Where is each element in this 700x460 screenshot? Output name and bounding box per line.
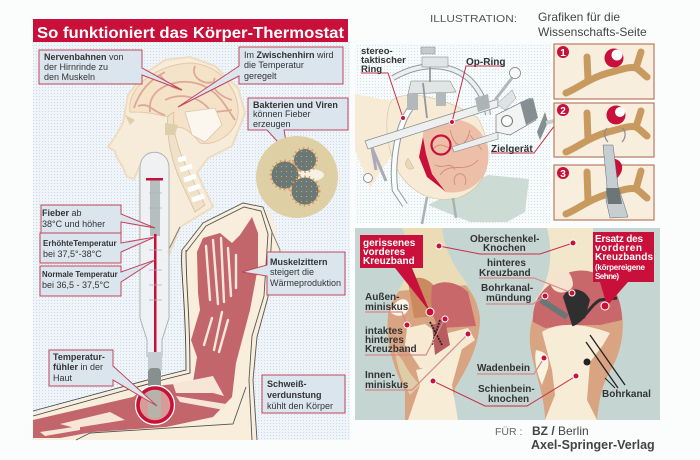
- label: Ersatz des vorderen Kreuzbands: Ersatz des: [595, 234, 643, 245]
- leader: stereotaktischer Ring: Ring: [361, 64, 382, 75]
- panel: body thermostat: [33, 19, 350, 440]
- measuring bar: [365, 99, 498, 149]
- credit: illustration heading: ILLUSTRATION:: [430, 13, 517, 25]
- credit: client: BZ / Berlin: [532, 424, 589, 438]
- label: Innenmeniskus: miniskus: [365, 380, 409, 391]
- label: Ersatz des vorderen Kreuzbands: [593, 232, 654, 310]
- label: hinteres Kreuzband: Kreuzband: [479, 268, 531, 279]
- label: Wadenbein: [477, 355, 547, 374]
- target device block: [452, 68, 580, 152]
- icon: left knob: [364, 174, 372, 182]
- callout: Nervenbahnen: [39, 50, 182, 90]
- thermometer: [140, 152, 169, 418]
- label: intaktes hinteres Kreuzband: [365, 316, 448, 355]
- panel: step 1 aneurysm: 1: [560, 48, 566, 59]
- label: Oberschenkelknochen: [436, 234, 576, 254]
- arm with muscles: [33, 203, 280, 440]
- label: Ersatz des vorderen Kreuzbands: vorderen: [595, 243, 642, 254]
- icon: bacteria and viruses: [256, 136, 338, 218]
- callout: Temperaturfühler: Temperatur-: [53, 352, 105, 362]
- callout: Fieber: [41, 205, 155, 233]
- callout: Schweißverdunstung: kühlt den Körper: [267, 401, 333, 411]
- leader: stereotaktischer Ring: [361, 46, 406, 120]
- label: Schienbeinknochen: Schienbein-: [478, 384, 535, 395]
- callout: Bakterien und Viren: Bakterien und Viren: [253, 100, 338, 110]
- label: Schienbeinknochen: [430, 373, 579, 406]
- panel: step 2 clip: [554, 103, 654, 157]
- panel: step 3 instrument: [554, 145, 654, 220]
- label: gerissenes vorderes Kreuzband: gerissenes: [363, 238, 416, 249]
- label: Bohrkanal: [602, 378, 651, 400]
- op ring arc: [393, 66, 488, 115]
- panel: stereotactic surgery: [355, 44, 580, 224]
- callout: Temperaturfühler: fühler in der: [53, 362, 103, 372]
- credit: illustration heading: Grafiken für die: [538, 10, 620, 24]
- label: Bohrkanalmündung: mündung: [486, 293, 532, 304]
- clamps on top: [407, 47, 456, 118]
- title: So funktioniert das Körper-Thermostat: [37, 25, 345, 42]
- label: Außenmeniskus: [365, 292, 410, 328]
- label: Wadenbein: Wadenbein: [477, 363, 530, 374]
- label: Bohrkanalmündung: Bohrkanal-: [481, 283, 533, 294]
- label: hinteres Kreuzband: hinteres: [487, 258, 526, 269]
- panel: step 3 instrument: 3: [560, 169, 566, 180]
- body: head and neck: [108, 57, 245, 260]
- callout: Schweißverdunstung: verdunstung: [267, 390, 322, 400]
- credit: client: Axel-Springer-Verlag: [531, 438, 655, 452]
- label: Ersatz des vorderen Kreuzbands: Sehne): [595, 272, 619, 281]
- callout: Erhöhte Temperatur: [40, 233, 155, 263]
- callout: Schweißverdunstung: [262, 375, 345, 413]
- credit: client: [495, 424, 655, 452]
- callout: Zwischenhirn: [178, 47, 343, 107]
- label: gerissenes vorderes Kreuzband: Kreuzband: [363, 256, 415, 267]
- callout: Erhöhte Temperatur: ErhöhteTemperatur: [43, 239, 117, 248]
- callout: Temperaturfühler: Haut: [53, 373, 73, 383]
- head support rods: [422, 197, 456, 224]
- label: Oberschenkelknochen: Oberschenkel-: [470, 234, 539, 245]
- callout: Normale Temperatur: [40, 260, 155, 296]
- label: Ersatz des vorderen Kreuzbands: (körpereigene: [595, 263, 646, 272]
- panel: step 1 aneurysm: [554, 44, 654, 99]
- label: intaktes hinteres Kreuzband: intaktes: [365, 326, 403, 337]
- label: gerissenes vorderes Kreuzband: [360, 235, 434, 316]
- callout: Muskelzittern: Muskelzittern: [270, 257, 328, 267]
- leader: stereotaktischer Ring: taktischer: [361, 55, 406, 66]
- callout: Bakterien und Viren: können Fieber: [253, 109, 311, 119]
- stereotactic ring: [394, 103, 415, 205]
- callout: Fieber: Fieber ab: [42, 208, 82, 218]
- callout: Nervenbahnen: Nervenbahnen von: [44, 52, 124, 62]
- right knee illustration: [530, 228, 625, 420]
- label: Schienbeinknochen: knochen: [488, 394, 529, 405]
- callout: Normale Temperatur: Normale Temperatur: [42, 270, 118, 279]
- callout: Nervenbahnen: den Muskeln: [44, 72, 95, 82]
- target ring: [432, 136, 450, 154]
- callout: Zwischenhirn: geregelt: [244, 71, 277, 81]
- callout: Bakterien und Viren: erzeugen: [253, 119, 291, 129]
- leader: Zielgerät: Zielgerät: [491, 144, 533, 155]
- label: intaktes hinteres Kreuzband: Kreuzband: [365, 344, 417, 355]
- title: [33, 19, 348, 42]
- label: Bohrkanalmündung: [481, 283, 548, 304]
- credit: illustration heading: [430, 10, 647, 39]
- label: Oberschenkelknochen: Knochen: [483, 243, 526, 254]
- callout: Fieber: 38°C und höher: [42, 219, 105, 229]
- leader: stereotaktischer Ring: stereo-: [361, 46, 393, 57]
- label: Außenmeniskus: miniskus: [365, 302, 409, 313]
- callout: Normale Temperatur: bei 36,5 - 37,5°C: [42, 280, 110, 290]
- credit: illustration heading: Wissenschafts-Seite: [538, 25, 647, 39]
- leader: Op-Ring: Op-Ring: [466, 57, 505, 68]
- operating table: [428, 175, 529, 222]
- label: Ersatz des vorderen Kreuzbands: Kreuzbands: [595, 252, 653, 263]
- callout: Temperaturfühler: [49, 350, 157, 406]
- temperature sensor ring: [136, 386, 174, 424]
- left knee illustration: [387, 228, 480, 420]
- callout: Bakterien und Viren: [248, 98, 348, 153]
- callout: Zwischenhirn: Im Zwischenhirn wird: [244, 50, 334, 60]
- callout: Muskelzittern: Wärmeproduktion: [270, 278, 341, 288]
- label: Außenmeniskus: Außen-: [365, 292, 399, 303]
- callout: Nervenbahnen: der Hirnrinde zu: [44, 62, 108, 72]
- label: hinteres Kreuzband: [479, 258, 575, 296]
- patient shoulder and head: [355, 94, 488, 199]
- leader: Zielgerät: [491, 118, 560, 155]
- callout: Erhöhte Temperatur: bei 37,5°-38°C: [43, 249, 102, 259]
- label: Innenmeniskus: [365, 331, 471, 391]
- callout: Zwischenhirn: die Temperatur: [244, 60, 304, 70]
- label: Innenmeniskus: Innen-: [365, 370, 395, 381]
- callout: Muskelzittern: [242, 252, 345, 295]
- leader: Op-Ring: [450, 57, 505, 124]
- label: Bohrkanal: Bohrkanal: [602, 389, 651, 400]
- panel: step 2 clip: 2: [560, 106, 566, 117]
- callout: Schweißverdunstung: Schweiß-: [267, 379, 307, 389]
- callout: Muskelzittern: steigert die: [270, 267, 314, 277]
- panel: knee: [355, 228, 660, 420]
- label: intaktes hinteres Kreuzband: hinteres: [365, 335, 404, 346]
- label: gerissenes vorderes Kreuzband: vorderes: [363, 247, 406, 258]
- credit: client: FÜR :: [495, 426, 522, 438]
